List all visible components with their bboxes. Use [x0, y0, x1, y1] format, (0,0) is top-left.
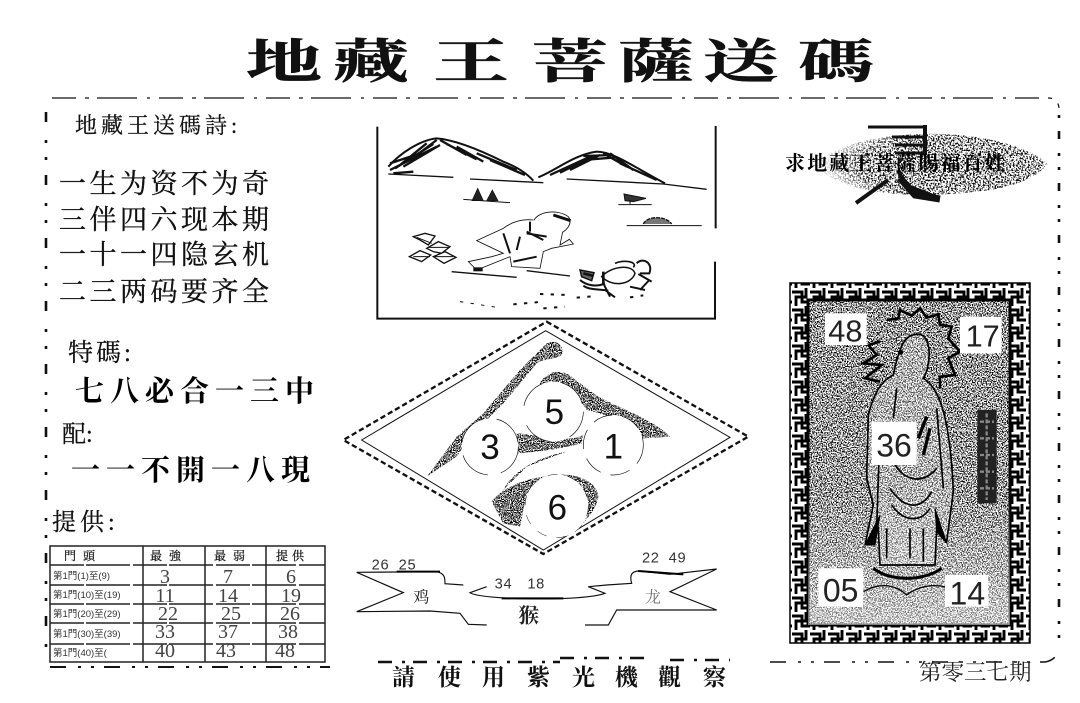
provider table: 最強 [150, 549, 188, 563]
provider table: 26 [280, 603, 300, 625]
footer note: 請使用紫光機觀察 [392, 665, 726, 690]
monk figure [452, 212, 573, 277]
oval prayer banner: 求地藏王菩薩賜福百姓 [785, 152, 1007, 175]
provider table [50, 546, 325, 662]
provider table: 提供 [276, 548, 308, 563]
circle 3: 3 [480, 428, 500, 467]
ribbon banner with zodiac numbers: 猴 [518, 604, 539, 627]
standing figure [863, 334, 957, 595]
ribbon banner with zodiac numbers: 34 [495, 576, 512, 592]
provider table: 最弱 [214, 549, 252, 563]
bracket emblem [856, 125, 940, 203]
circle 1 [583, 415, 643, 475]
dashed diamond [343, 322, 748, 554]
poem text block: 三伴四六现本期 [59, 205, 272, 235]
plant [409, 233, 456, 263]
ribbon banner with zodiac numbers: 26 [372, 558, 389, 574]
provider table: 14 [218, 585, 238, 607]
special code text: 七八必合一三中 [75, 375, 320, 408]
issue number: 第零三七期 [919, 660, 1032, 685]
ribbon banner with zodiac numbers: 鸡 [413, 588, 429, 606]
provider table: 19 [281, 585, 301, 607]
circle 6 [525, 474, 588, 538]
number 36: 36 [876, 428, 912, 464]
provider table: 33 [155, 621, 175, 643]
provider table: 第1門(40)至( [53, 647, 108, 659]
halo [863, 308, 960, 388]
ribbon banner with zodiac numbers: 22 [642, 550, 660, 566]
crab [580, 261, 652, 297]
poem text block [59, 169, 272, 307]
dashed outer frame [46, 98, 1059, 667]
oval prayer banner [785, 125, 1050, 205]
circle 3 [462, 418, 518, 475]
provider table: 22 [158, 603, 178, 625]
pairing text: 一一不開一八現 [71, 454, 316, 487]
poem text block: 一生为资不为奇 [59, 169, 272, 199]
number 36 [872, 422, 917, 465]
mountains [388, 138, 707, 189]
dark seal [977, 410, 997, 503]
number 48: 48 [828, 315, 862, 349]
provider table: 37 [218, 621, 238, 643]
inner diamond [362, 331, 730, 550]
title: 地藏王菩薩送碼 [246, 36, 874, 88]
number 05: 05 [823, 573, 858, 609]
illustration: monk and crab by the shore [377, 126, 716, 319]
pairing heading: 配: [62, 421, 93, 448]
staff [918, 417, 930, 455]
ribbon banner with zodiac numbers [357, 550, 717, 627]
provider table: 第1門(10)至(19) [53, 589, 121, 601]
ribbon banner with zodiac numbers: 龙 [645, 588, 661, 606]
ribbon banner with zodiac numbers: 49 [669, 550, 686, 566]
provider heading: 提供: [52, 509, 119, 536]
poem text block: 二三两码要齐全 [59, 277, 272, 307]
provider table: 11 [155, 585, 175, 607]
picture frame [377, 126, 716, 319]
grainy background [808, 300, 1010, 625]
provider table: 6 [286, 566, 296, 588]
number 17: 17 [966, 320, 1000, 354]
circle 5 [523, 382, 583, 442]
meander border [790, 283, 1030, 643]
provider table: 40 [155, 640, 175, 662]
provider table: 43 [216, 640, 236, 662]
circle 5: 5 [545, 393, 564, 432]
brush strokes [427, 342, 670, 527]
number 14: 14 [950, 575, 985, 611]
provider table: 25 [221, 603, 241, 625]
diamond panel with numbered circles [343, 322, 748, 554]
provider table: 第1門(1)至(9) [53, 570, 110, 582]
provider table: 48 [275, 640, 295, 662]
ribbon banner with zodiac numbers: 18 [527, 576, 545, 592]
provider table: 第1門(20)至(29) [53, 608, 121, 620]
provider table: 第1門(30)至(39) [53, 628, 121, 640]
circle 6: 6 [548, 488, 567, 527]
Buddha card [790, 283, 1030, 643]
trees and rocks [463, 188, 702, 226]
circle 1: 1 [604, 427, 623, 466]
ribbon banner with zodiac numbers: 25 [399, 558, 416, 574]
provider table: 門頭 [64, 549, 102, 563]
oval grain [815, 134, 1047, 195]
provider table: 7 [223, 566, 233, 588]
ground dots [460, 294, 643, 308]
provider table: 38 [278, 621, 298, 643]
provider table: 3 [160, 566, 170, 588]
poem heading: 地藏王送碼詩: [75, 113, 241, 138]
poem text block: 一十一四隐玄机 [59, 240, 272, 270]
special code heading: 特碼: [68, 339, 134, 367]
